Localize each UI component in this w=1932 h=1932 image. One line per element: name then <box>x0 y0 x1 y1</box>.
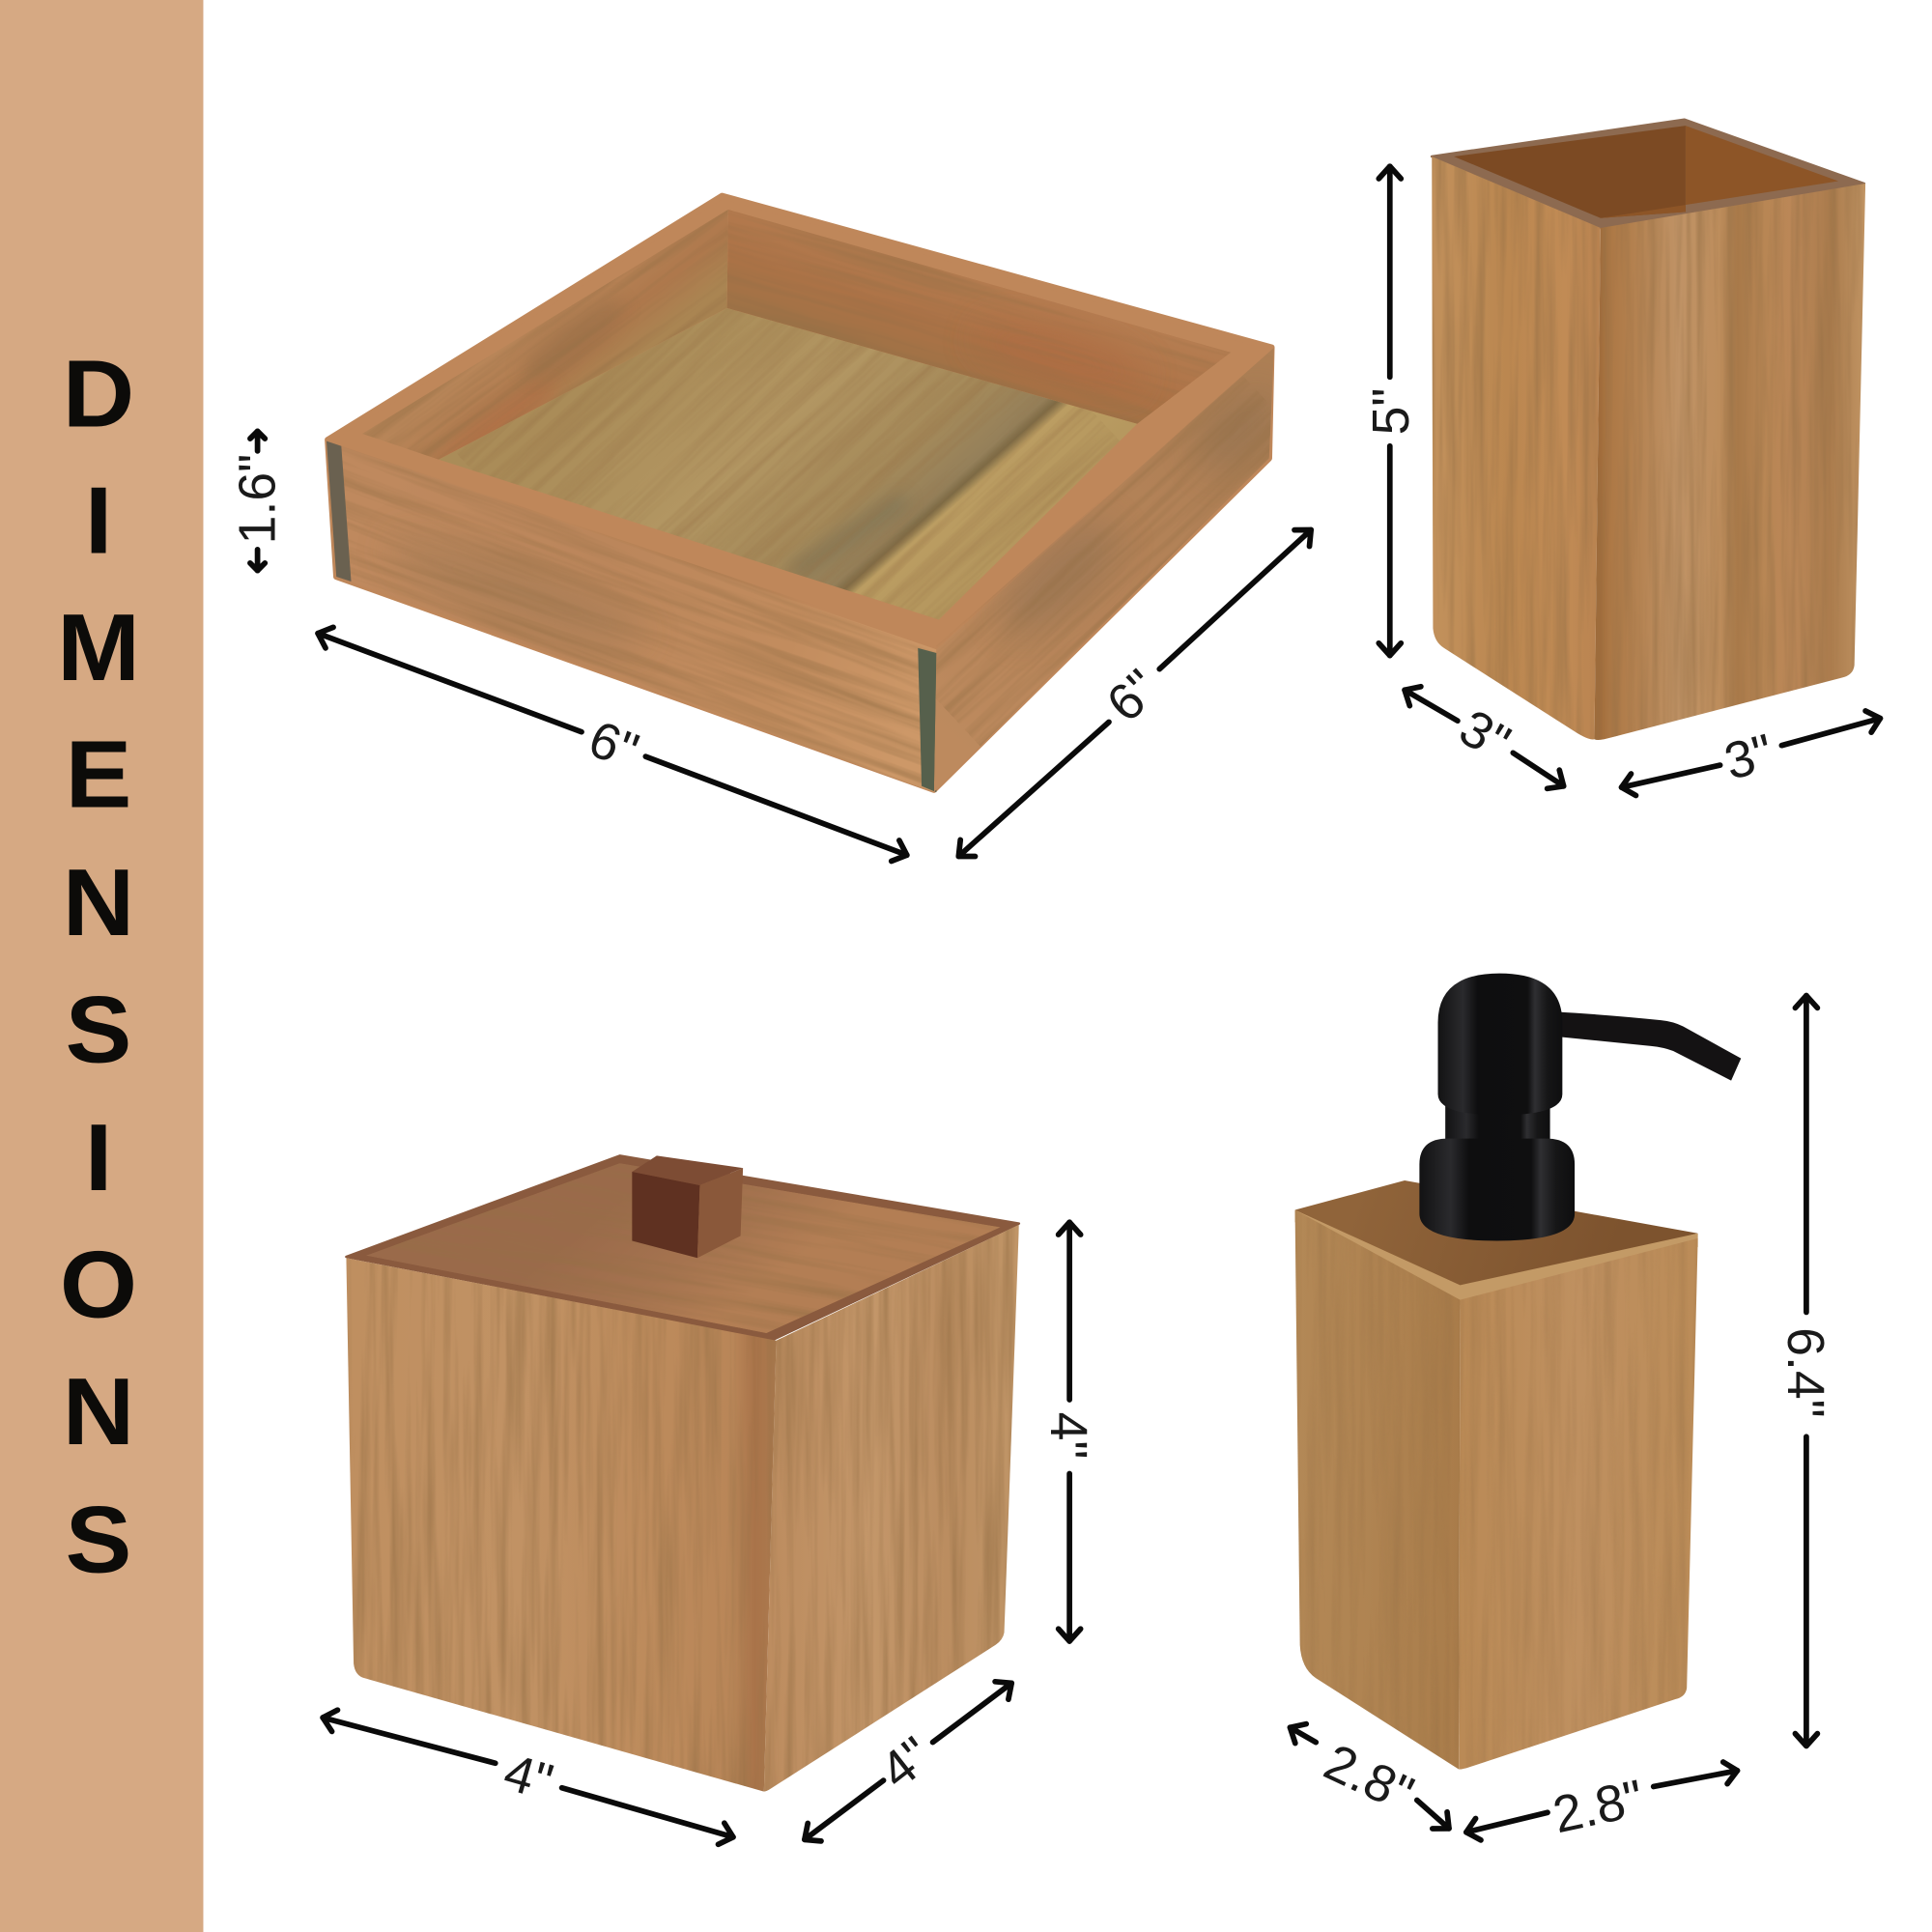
dimension: box depth 4" <box>805 1683 1011 1839</box>
dimension: box height 4": 4" <box>1039 1412 1096 1459</box>
dimension: tray width 6": 6" <box>582 711 645 781</box>
title: DIMENSIONS: M <box>57 595 140 701</box>
title: DIMENSIONS: I <box>85 1105 112 1211</box>
dimension: tumbler side 3": 3" <box>1719 724 1779 791</box>
title: DIMENSIONS: O <box>60 1233 137 1338</box>
title: DIMENSIONS: I <box>85 469 112 574</box>
title: DIMENSIONS: N <box>63 850 134 956</box>
product: wooden tumbler <box>1417 120 1873 752</box>
dimension: dispenser side 2.8" <box>1466 1770 1737 1844</box>
title: DIMENSIONS: S <box>66 1488 131 1593</box>
dimension: tumbler side 3" <box>1405 690 1564 786</box>
title: DIMENSIONS: D <box>63 342 134 447</box>
dimension: tray width 6" <box>318 634 907 855</box>
dimension: tumbler side 3" <box>1622 719 1880 791</box>
dimension: dispenser side 2.8": 2.8" <box>1548 1770 1648 1844</box>
dimension: tumbler side 3": 3" <box>1450 699 1520 772</box>
title: DIMENSIONS: N <box>63 1359 134 1464</box>
product: wooden tray <box>325 193 1275 793</box>
dimension: box width 4": 4" <box>497 1744 559 1811</box>
product: wooden box with lid <box>332 1077 1029 1799</box>
dimension: dispenser side 2.8": 2.8" <box>1316 1734 1422 1824</box>
product: soap dispenser <box>1282 974 1741 1780</box>
title: DIMENSIONS <box>57 342 140 1593</box>
dimension: dispenser height 6.4": 6.4" <box>1776 1327 1833 1418</box>
dimension: tray height 1.6": 1.6" <box>229 454 286 544</box>
dimension: dispenser side 2.8" <box>1290 1727 1449 1829</box>
icon: black pump <box>1419 974 1741 1240</box>
dimension: tray depth 6" <box>958 529 1311 856</box>
dimension: box depth 4": 4" <box>870 1726 943 1801</box>
title: DIMENSIONS: E <box>66 723 131 828</box>
dimension: tumbler height 5": 5" <box>1363 388 1420 435</box>
title: DIMENSIONS: S <box>66 978 131 1083</box>
dimension: tray depth 6": 6" <box>1096 659 1170 733</box>
icon: lid knob <box>632 1155 743 1258</box>
panel: dimensions sidebar <box>0 0 203 1932</box>
dimension: box width 4" <box>323 1718 733 1837</box>
